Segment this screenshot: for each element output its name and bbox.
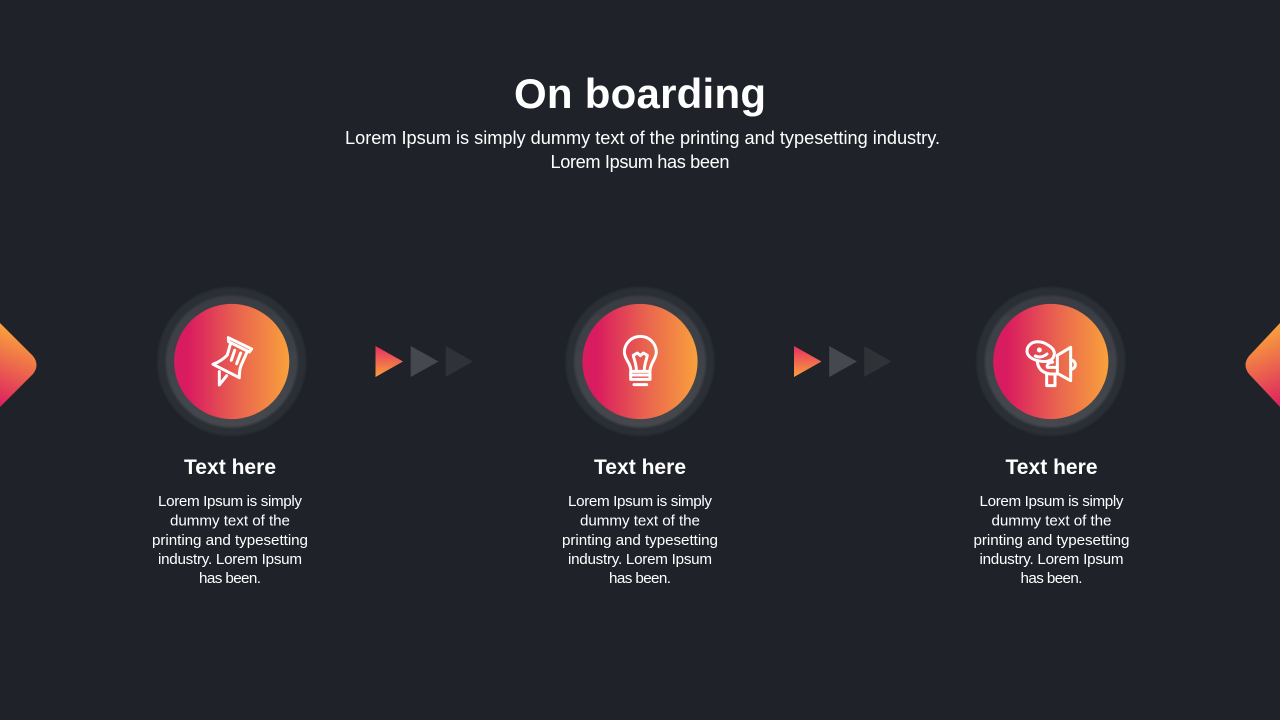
arrow: active: [376, 346, 403, 377]
arrow group 2: [794, 346, 892, 377]
left diamond arrow: [0, 323, 36, 407]
arrow group 1: [376, 346, 473, 377]
arrow: faint: [446, 346, 473, 377]
step 2 description: printing and typesetting: [562, 532, 718, 549]
step 3 description: Lorem Ipsum is simply: [980, 493, 1124, 510]
step 1 description: dummy text of the: [170, 512, 290, 530]
icon: light bulb: [624, 336, 656, 385]
step 1: [152, 287, 308, 587]
step 3 description: [974, 493, 1130, 587]
step 3 description: printing and typesetting: [974, 532, 1130, 549]
arrow: mid: [829, 346, 857, 377]
title: On boarding: [514, 70, 766, 117]
step 2 description: has been.: [609, 570, 671, 587]
step 2 description: Lorem Ipsum is simply: [568, 493, 712, 510]
arrow: mid: [411, 346, 438, 377]
step 1 description: has been.: [199, 570, 261, 587]
subtitle: Lorem Ipsum has been: [550, 152, 730, 172]
step 3 description: has been.: [1020, 570, 1082, 587]
step 3 description: industry. Lorem Ipsum: [980, 551, 1124, 568]
step 1 description: industry. Lorem Ipsum: [158, 551, 302, 568]
step 3 circle badge: [976, 287, 1125, 436]
step 1 circle badge: [157, 287, 306, 436]
step 2 heading: Text here: [594, 456, 686, 479]
step 1 description: Lorem Ipsum is simply: [158, 493, 302, 510]
step 3: [974, 287, 1130, 587]
step 1 description: [152, 493, 308, 587]
subtitle: Lorem Ipsum is simply dummy text of the printing and typesetting industry.: [345, 128, 940, 148]
step 2 description: dummy text of the: [580, 512, 700, 530]
right diamond arrow: [1246, 323, 1280, 407]
icon: megaphone with speech bubble: [1027, 342, 1075, 386]
arrow: active: [794, 346, 822, 377]
step 3 description: dummy text of the: [992, 512, 1112, 530]
step 3 heading: Text here: [1006, 456, 1098, 479]
step 1 heading: Text here: [184, 456, 276, 479]
subtitle: [345, 128, 940, 172]
arrow: faint: [864, 346, 892, 377]
step 1 description: printing and typesetting: [152, 532, 308, 549]
step 2: [562, 287, 718, 587]
step 2 circle badge: [566, 287, 714, 436]
step 2 description: [562, 493, 718, 587]
step 2 description: industry. Lorem Ipsum: [568, 551, 712, 568]
icon: push pin: [213, 338, 252, 385]
